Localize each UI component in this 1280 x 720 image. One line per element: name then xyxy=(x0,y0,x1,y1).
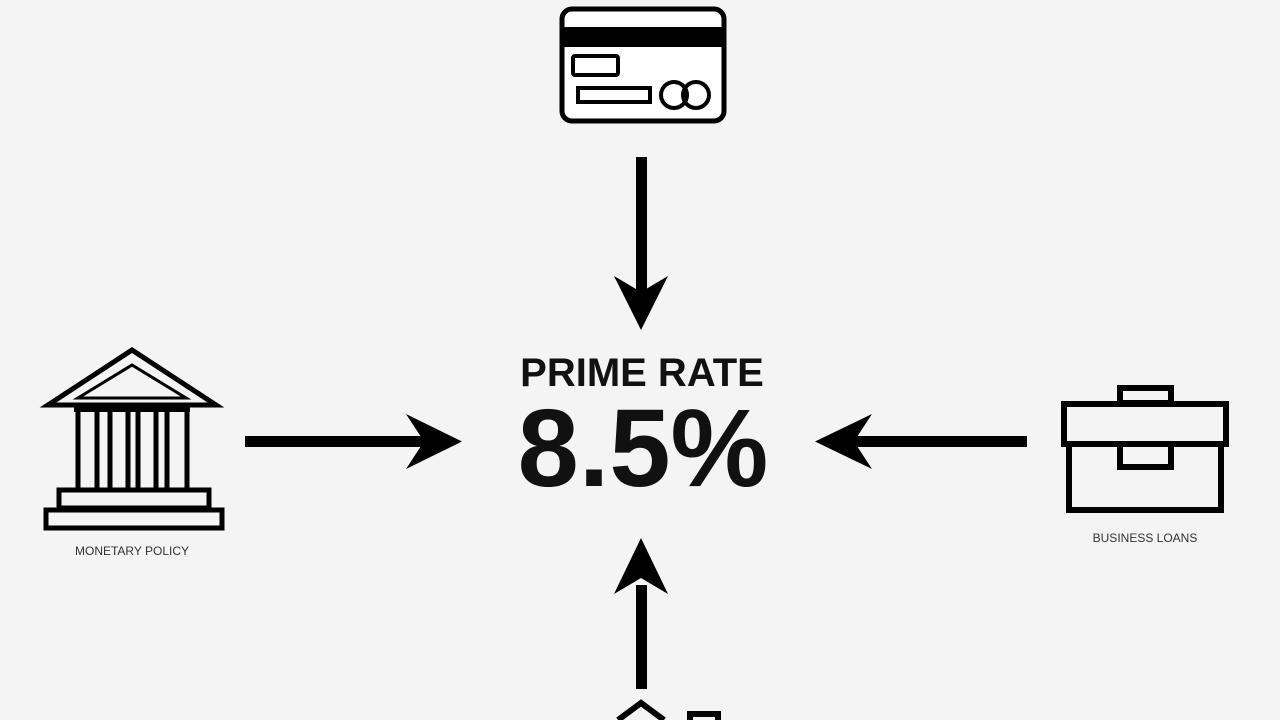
icon: credit card xyxy=(562,9,724,121)
rate value: 8.5% xyxy=(518,387,768,510)
icon: briefcase xyxy=(1064,388,1226,510)
title: PRIME RATE xyxy=(520,351,764,395)
label: briefcase: BUSINESS LOANS xyxy=(1093,531,1197,545)
arrow: up from bottom xyxy=(614,538,668,689)
icon: house (cropped) xyxy=(618,703,718,720)
arrow: down from card xyxy=(614,157,668,330)
arrow: from bank xyxy=(245,414,462,469)
icon: bank xyxy=(46,350,222,528)
arrow: from briefcase xyxy=(815,414,1027,469)
label: bank: MONETARY POLICY xyxy=(75,544,189,558)
